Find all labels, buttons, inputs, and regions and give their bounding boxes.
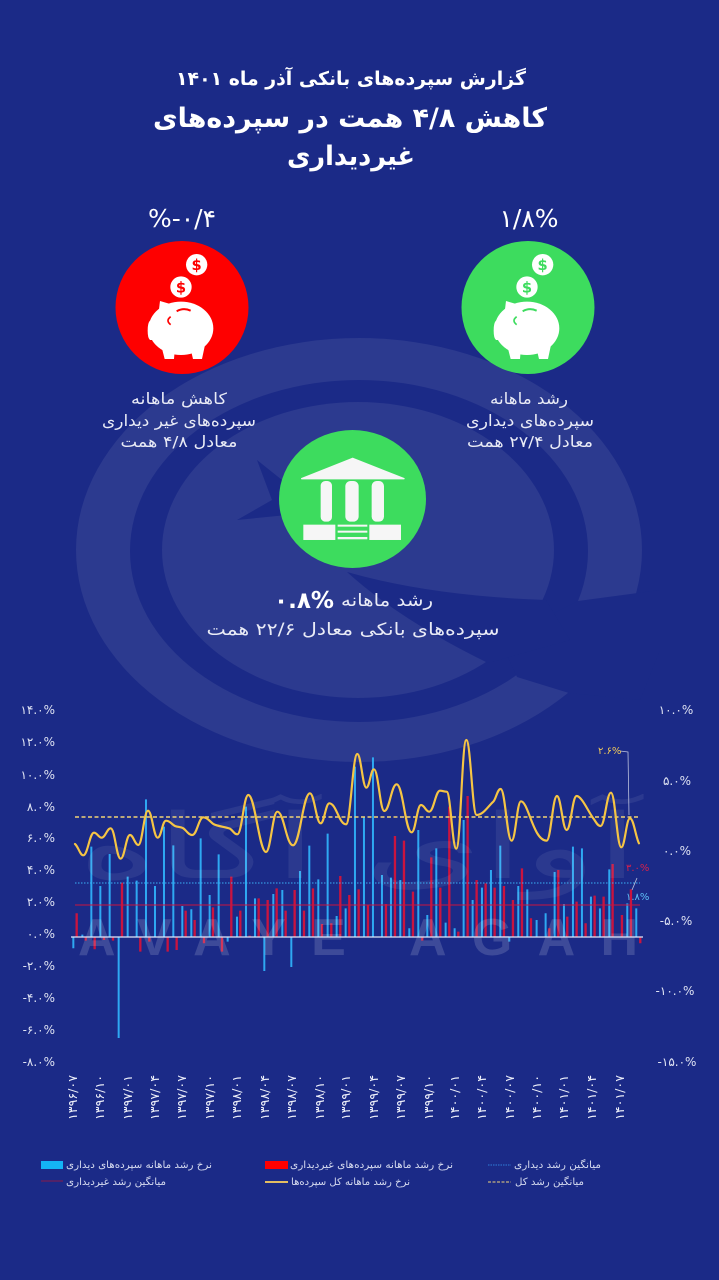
watermark logo rings xyxy=(76,338,660,762)
x axis date labels: ۱۴۰۰/۰۱ xyxy=(447,1075,462,1120)
x axis date labels: ۱۳۹۷/۱۰ xyxy=(202,1075,217,1120)
average line: total xyxy=(75,816,640,818)
title: کاهش ۴/۸ همت در سپرده‌های xyxy=(153,103,547,134)
x axis date labels: ۱۳۹۹/۰۴ xyxy=(366,1075,381,1120)
average line: non-demand xyxy=(75,904,640,906)
x axis date labels: ۱۴۰۰/۰۷ xyxy=(502,1075,517,1120)
legend xyxy=(41,1159,601,1188)
x axis date labels: ۱۳۹۸/۰۱ xyxy=(229,1075,244,1120)
watermark: brand text: آوای آگاه xyxy=(78,794,645,901)
text: non-demand description: کاهش ماهانه xyxy=(131,390,228,408)
left axis labels: ۱۴.۰% xyxy=(20,703,55,717)
title: گزارش سپرده‌های بانکی آذر ماه ۱۴۰۱ xyxy=(176,66,527,90)
left axis labels: -۶.۰% xyxy=(23,1023,55,1037)
left axis labels: ۴.۰% xyxy=(27,863,55,877)
watermark: brand text xyxy=(78,794,645,967)
callout: demand average 1.8 xyxy=(626,878,649,903)
x axis date labels: ۱۴۰۱/۰۱ xyxy=(556,1075,571,1120)
right axis labels: ۱۰.۰% xyxy=(659,703,693,717)
text: demand description xyxy=(466,390,594,451)
left axis labels: ۱۰.۰% xyxy=(20,768,55,782)
legend: نرخ رشد ماهانه سپرده‌های غیردیداری xyxy=(290,1160,453,1171)
legend: نرخ رشد ماهانه سپرده‌های دیداری xyxy=(66,1160,212,1171)
right axis labels: ۰.۰% xyxy=(663,844,691,858)
legend: نرخ رشد ماهانه کل سپرده‌ها xyxy=(291,1177,410,1188)
x axis date labels: ۱۳۹۹/۱۰ xyxy=(421,1075,436,1120)
icon: red piggy bank xyxy=(116,241,248,374)
value: minus 0.4 percent: %-۰/۴ xyxy=(148,204,216,233)
left axis labels: -۴.۰% xyxy=(23,991,55,1005)
icon: green piggy bank xyxy=(462,241,594,374)
x axis date labels: ۱۳۹۹/۰۱ xyxy=(338,1075,353,1120)
legend: میانگین رشد دیداری xyxy=(514,1159,601,1171)
text: non-demand description xyxy=(102,390,256,451)
left axis labels: -۲.۰% xyxy=(23,959,55,973)
x axis date labels: ۱۴۰۰/۱۰ xyxy=(529,1075,544,1120)
x axis date labels: ۱۳۹۷/۰۷ xyxy=(174,1075,189,1120)
left axis labels: ۸.۰% xyxy=(27,800,55,814)
x axis date labels: ۱۴۰۱/۰۷ xyxy=(612,1075,627,1120)
panel: demand deposits growth xyxy=(462,204,594,451)
bars: demand deposits xyxy=(73,757,636,1038)
right axis labels xyxy=(656,703,696,1069)
text: demand description: رشد ماهانه xyxy=(490,390,568,408)
bars: non-demand deposits xyxy=(77,796,640,952)
text: non-demand description: معادل ۴/۸ همت xyxy=(120,433,238,451)
right axis labels: -۱۵.۰% xyxy=(658,1055,696,1069)
average line: demand xyxy=(75,882,640,884)
x axis date labels: ۱۴۰۱/۰۴ xyxy=(584,1075,599,1120)
text: non-demand description: سپرده‌های غیر دیداری xyxy=(102,412,256,431)
text: monthly growth 0.8 percent: ۰.۸% xyxy=(274,588,334,614)
value: 1.8 percent: ۱/۸% xyxy=(499,204,559,233)
right axis labels: ۵.۰% xyxy=(663,774,691,788)
watermark: brand text: AVAYE AGAH xyxy=(78,909,638,967)
line: total deposit growth xyxy=(75,740,639,859)
x axis date labels: ۱۳۹۸/۰۴ xyxy=(257,1075,272,1120)
x axis date labels: ۱۴۰۰/۰۴ xyxy=(474,1075,489,1120)
callout: total average 2.6 xyxy=(598,746,629,815)
left axis labels: ۰.۰% xyxy=(27,927,55,941)
text: demand description: سپرده‌های دیداری xyxy=(466,412,594,431)
callout: non-demand average 3.0: ۳.۰% xyxy=(626,863,649,874)
x axis date labels: ۱۳۹۸/۱۰ xyxy=(312,1075,327,1120)
x axis date labels: ۱۳۹۸/۰۷ xyxy=(284,1075,299,1120)
text: monthly growth 0.8 percent: رشد ماهانه xyxy=(341,591,433,611)
x axis date labels xyxy=(65,1075,627,1120)
panel: non-demand deposits decline xyxy=(102,204,256,451)
left axis labels: ۲.۰% xyxy=(27,895,55,909)
title: غیردیداری xyxy=(287,141,415,172)
right axis labels: -۱۰.۰% xyxy=(656,984,694,998)
x axis date labels: ۱۳۹۶/۰۷ xyxy=(65,1075,80,1120)
zero axis line xyxy=(71,936,643,938)
title xyxy=(153,66,547,172)
icon: bank building xyxy=(279,430,426,568)
legend: میانگین رشد کل xyxy=(515,1176,584,1188)
text: monthly growth 0.8 percent xyxy=(274,588,433,614)
chart: monthly deposit growth xyxy=(20,703,696,1188)
left axis labels: ۱۲.۰% xyxy=(20,735,55,749)
right axis labels: -۵.۰% xyxy=(660,914,692,928)
left axis labels: ۶.۰% xyxy=(27,831,55,845)
text: bank deposits equal 22.6: سپرده‌های بانکی معادل ۲۲/۶ همت xyxy=(207,620,500,640)
callout: demand average 1.8: ۱.۸% xyxy=(626,892,649,903)
x axis date labels: ۱۳۹۹/۰۷ xyxy=(393,1075,408,1120)
x axis date labels: ۱۳۹۷/۰۴ xyxy=(147,1075,162,1120)
left axis labels: -۸.۰% xyxy=(23,1055,55,1069)
x axis date labels: ۱۳۹۶/۱۰ xyxy=(92,1075,107,1120)
panel: total deposits growth xyxy=(207,430,500,640)
left axis labels xyxy=(20,703,55,1069)
callout: total average 2.6: ۲.۶% xyxy=(598,746,621,757)
x axis date labels: ۱۳۹۷/۰۱ xyxy=(120,1075,135,1120)
legend: میانگین رشد غیردیداری xyxy=(66,1176,166,1188)
text: demand description: معادل ۲۷/۴ همت xyxy=(467,433,593,451)
